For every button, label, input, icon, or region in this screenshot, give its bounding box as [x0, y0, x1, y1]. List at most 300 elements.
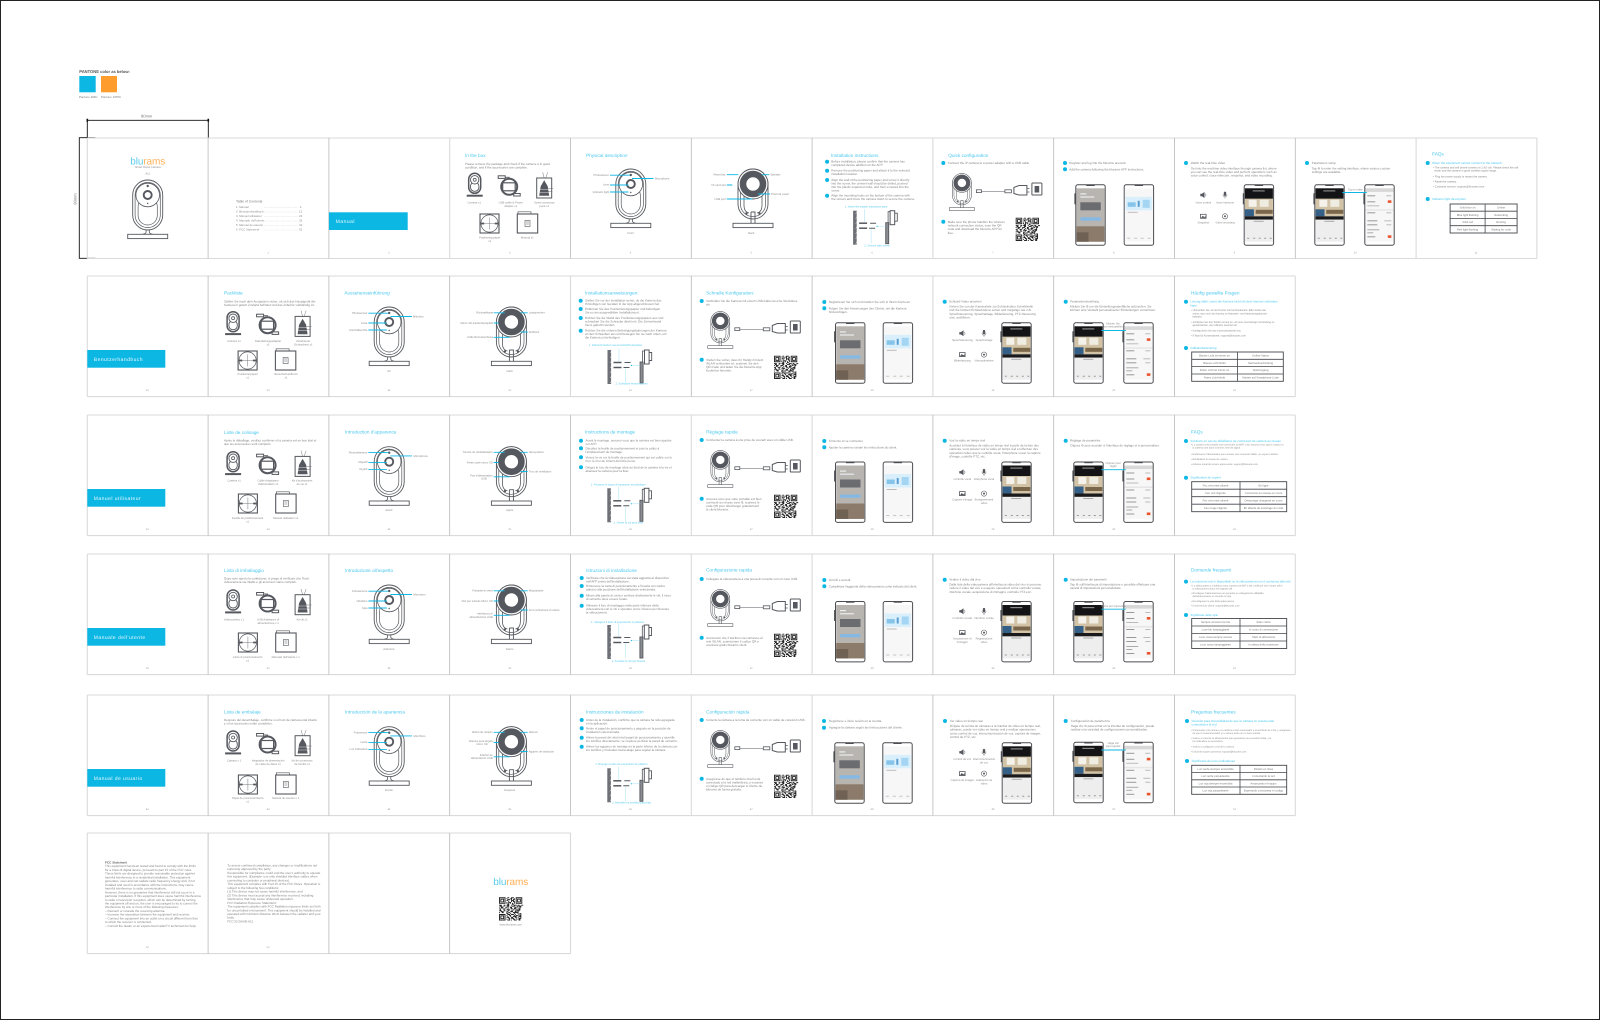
labels: alimentación USB: [471, 756, 493, 760]
connector label: para ajustar: [1106, 745, 1121, 748]
diagram captions: [591, 621, 646, 663]
page number: 46: [629, 808, 632, 811]
control icons: [959, 469, 987, 496]
statement body: body.: [227, 916, 235, 920]
labels: Spia: [362, 607, 368, 610]
accessory labels: Kit d'accessoires: [292, 480, 312, 482]
icon labels: Sprachanlage: [976, 339, 993, 342]
page: S'inscrire: [822, 439, 913, 531]
labels: [463, 450, 552, 512]
icon labels: [1195, 202, 1235, 224]
page: Réglage de paramètre: [1064, 439, 1160, 531]
phone: home: [1124, 185, 1154, 245]
intro text: y si los accesorios están completos.: [224, 722, 273, 726]
accessory labels: Manual x1: [521, 236, 534, 240]
steps text: Allineare il foro di montaggio nella parte inferiore della: [586, 604, 659, 608]
answers: la videocamera siano nel segnale wifi: [1192, 588, 1233, 590]
accessory labels: Adaptador de alimentación: [252, 760, 284, 762]
page number: 34: [387, 667, 391, 670]
step 1: Connectez la caméra à une prise de courant avec un câble USB.: [706, 438, 794, 442]
answers: • Plug the power supply to restart the camera.: [1433, 176, 1488, 178]
heading: Instructions de montage: [585, 430, 635, 435]
toc rows: 12: [299, 210, 303, 214]
page number: 8: [1113, 252, 1115, 254]
step 2: connecté au réseau sans fil, scannez le: [706, 500, 760, 504]
accessory labels: Videocamera x 1: [224, 618, 245, 622]
step: Accédez à l'interface de vidéo en temps réel à partir de la liste des: [949, 444, 1039, 448]
banner text: Manuel utilisateur: [94, 496, 141, 502]
heading: Instrucciones de instalación: [586, 710, 644, 715]
labels: USB: [481, 478, 487, 481]
connector label: régler: [1110, 464, 1117, 468]
phones with connector: [1072, 323, 1153, 383]
page: Introducción de la apariencia back: [469, 727, 554, 811]
banner: [87, 350, 165, 368]
indicator table: Luce blu lampeggiante: [1202, 629, 1230, 632]
labels: Foro ventazione di calore: [529, 609, 560, 612]
accessory labels: de cable de datos x1: [255, 763, 281, 766]
accessory labels: Datenleitungsadapter: [255, 340, 281, 343]
wall mount diagram: [853, 209, 897, 245]
indicator table: Sempre accesa luce blu: [1201, 621, 1231, 624]
toc rows: 3: [300, 205, 302, 209]
page: register: [1063, 161, 1154, 254]
step: Ver video en tiempo real: [950, 719, 983, 723]
pantone color header: Pantone 298C: [79, 95, 97, 99]
phone: home: [883, 323, 913, 383]
page number: 35: [508, 667, 512, 670]
steps text: die Kamera zu befestigen.: [585, 336, 621, 340]
indicator table: [1192, 482, 1287, 512]
page: FCC statement 1: [105, 860, 202, 949]
icon labels: Video recording: [1215, 222, 1235, 224]
labels: Vor: [387, 370, 391, 373]
phone: video: [1243, 185, 1274, 245]
indicator table: Blue light flashing: [1457, 214, 1479, 217]
page number: 1: [267, 252, 269, 254]
step 2: WLAN verbunden ist, scannen Sie den: [706, 361, 759, 365]
icon labels: video: [981, 782, 988, 785]
accessory labels: alimentazione x 1: [257, 622, 279, 625]
step: können eine Vielzahl personalisierter Einstellungen vornehmen.: [1070, 308, 1156, 312]
steps text: [586, 576, 671, 615]
step 2: kostenlos herunter.: [706, 369, 732, 373]
front camera: [369, 727, 409, 785]
question: Solutions en cas de défaillance de connexion de caméra au réseau: [1190, 439, 1281, 443]
indicator table: Networking: [1494, 214, 1508, 217]
labels: Photodétecteur: [349, 450, 367, 454]
diagram captions: 1. Spingere il tubo di espansione in plastica: [591, 621, 644, 624]
intro text: Dopo aver aperto la confezione, si prega di verificare che l'host: [224, 576, 309, 580]
labels: Microphone: [655, 177, 670, 180]
steps: S'inscrire et se connecter.: [829, 439, 864, 443]
statement body: to which the receiver is connected.: [105, 920, 152, 924]
labels: Kontrollleuchte: [349, 329, 368, 332]
page: Configuración de parámetros: [1064, 719, 1155, 811]
page number: 50: [1112, 808, 1116, 811]
statement body: FCC ID:2AIXB-A11: [227, 919, 253, 923]
heading: Schnelle Konfiguration:: [706, 291, 754, 296]
labels: Trou de ventilation: [529, 470, 552, 473]
indicator table: [1192, 352, 1283, 381]
accessory labels: x1: [267, 343, 270, 346]
heading: FAQs: [1191, 430, 1203, 434]
statement body: To assure continued compliance, any changes or modifications not: [227, 864, 317, 868]
page: FAQs French: [1184, 430, 1287, 531]
indicator table: Feu rouge clignote: [1204, 507, 1227, 510]
labels: Front: [627, 232, 634, 235]
icon labels: de voz: [980, 761, 989, 764]
wall mount diagram: [608, 348, 652, 384]
indicator table: Startvorgang: [1253, 369, 1269, 372]
heading: In the box: [465, 153, 486, 158]
banner: [329, 212, 408, 230]
steps: Folgen Sie den Anweisungen des Clients, um die Kamera: [829, 306, 907, 310]
page: Echtzeit-Video: [943, 300, 1036, 392]
labels: Lens: [603, 184, 610, 186]
question: La soluzione non è disponibile se la videocamera non è connessa alla rete: [1190, 580, 1291, 584]
leader lines: [494, 591, 528, 615]
connector label: um einzustellen: [1104, 326, 1123, 329]
statement body: – Increase the separation between the equipment and receiver.: [105, 913, 190, 917]
question: kann.: [1190, 303, 1198, 307]
labels: Voyant: [359, 468, 368, 471]
labels: Luz indicadora: [350, 748, 368, 751]
control icons: [1200, 192, 1228, 219]
indicator table: Arrancando el equipo: [1250, 782, 1277, 785]
steps text: Avant le montage, assurez-vous que la caméra est bien ajoutée: [586, 439, 672, 443]
heading: Réglage rapide: [706, 430, 738, 434]
step: Parametereinstellung: [1070, 300, 1099, 304]
steps text: en la aplicación.: [586, 722, 608, 726]
steps text: Verificare che la videocamera sia stata aggiunta al dispositivo: [586, 576, 669, 580]
page number: 11: [1475, 252, 1478, 254]
labels: [462, 590, 560, 651]
step bullets: [825, 160, 829, 198]
page number: 16: [629, 389, 632, 392]
icon labels: [952, 478, 995, 505]
step: Réglage de paramètre: [1070, 439, 1101, 443]
statement body: This equipment has been tested and found to comply with the limits: [105, 864, 196, 868]
page number: 40: [1112, 667, 1116, 670]
dimension brackets 80mm: [72, 114, 208, 258]
toc rows: 2. Benutzerhandbuch: [236, 210, 264, 214]
labels: Microfono: [413, 593, 426, 596]
page number: 19: [991, 389, 995, 392]
page number: 41: [1233, 667, 1236, 670]
labels: Indicator light: [593, 191, 609, 194]
accessories bottom row: [238, 631, 296, 652]
page number: 12: [146, 389, 149, 392]
labels: Back: [748, 232, 755, 235]
indicator table: Luce rossa sempre accesa: [1199, 636, 1232, 639]
page number: 47: [750, 808, 753, 811]
page: Manual de usuario banner: [87, 769, 165, 811]
labels: Interfaccia di: [477, 613, 493, 616]
statement body: (2) This device must accept any interference received, including: [227, 893, 314, 897]
camera and adapter diagram: [708, 590, 800, 626]
accessory labels: [227, 758, 313, 803]
page number: 49: [991, 808, 995, 811]
leader lines: [368, 313, 412, 330]
steps: [1063, 161, 1144, 171]
page number: 15: [508, 389, 512, 392]
indicator table: Stato di attivazione: [1252, 636, 1276, 639]
page: Installationsanweisungen: [579, 291, 667, 392]
accessory labels: Screw accessory: [534, 202, 555, 204]
page number: 9: [1234, 252, 1236, 254]
page: Introducción de la apariencia front: [345, 710, 426, 811]
accessory labels: de vis x1: [297, 483, 308, 486]
labels: [350, 731, 426, 792]
indicator table: Warten auf Smartphone-Code: [1242, 377, 1279, 380]
heading: Introduzione all'aspetto: [345, 568, 393, 573]
step: como control de voz, intercomunicación de voz, captura de imagen,: [950, 731, 1041, 735]
labels: Nach: [506, 370, 513, 373]
steps text: mur, le mur de ciment doit être percé.: [586, 459, 636, 463]
labels: Port d'alimentation: [470, 474, 493, 478]
camera and adapter diagram: [949, 174, 1042, 210]
heading: Configuración rápida: [706, 710, 750, 714]
toc rows: 3. Manuel utilisateur: [236, 214, 262, 218]
steps text: into the screw, the cement wall should be drilled, pushed: [831, 182, 908, 186]
heading: Preguntas frecuentes: [1191, 710, 1236, 714]
steps: [822, 719, 903, 730]
labels: Speaker: [770, 174, 781, 177]
page: parameter setup: [1305, 161, 1394, 254]
page: Introduction d'apparence back: [463, 447, 552, 531]
step: usw. ausführen.: [949, 316, 971, 320]
diagram captions: [845, 205, 890, 247]
labels: Objectif: [358, 461, 368, 464]
intro text: Please remove the package and check if the camera is in good: [465, 162, 550, 166]
accessory labels: Manual de usuario x 1: [272, 797, 300, 800]
intro text: Stellen Sie nach dem Auspacken sicher, ob sich das Hauptgerät der: [224, 300, 316, 304]
page number: 52: [146, 946, 149, 949]
indicator table: In corso di connessione: [1249, 629, 1278, 632]
phone: login: [834, 323, 865, 383]
accessory labels: Kit de accesorios: [292, 760, 313, 762]
step bullets: [580, 718, 584, 749]
steps text: Align the wall of the positioning paper and screw it directly: [831, 178, 910, 182]
page number: 29: [991, 528, 995, 531]
step 1: [700, 299, 798, 307]
step 2: [700, 636, 763, 647]
page: Manual banner: [329, 212, 408, 254]
labels: Fotosensore: [352, 590, 368, 593]
intro text: condition, and if the accessories are complete.: [465, 166, 528, 170]
page: real-time video: [1184, 161, 1277, 254]
step: caméras, vous pouvez voir la vidéo en temps réel et effectuer des: [949, 447, 1038, 451]
icon labels: Enregistrement: [975, 498, 993, 502]
diagram captions: 1. Dehnschrauben aus Kunststoff einsetzen: [589, 344, 643, 347]
answers: de que el router/enrutador y la cámara estén en un buen estado.: [1192, 732, 1261, 735]
heading: Installation instructions: [831, 153, 879, 158]
heading: FAQs: [1432, 152, 1444, 156]
labels: Kühlloch: [529, 331, 540, 334]
labels: [352, 590, 426, 651]
step 1: Connect the IP camera to a power adapter with a USB cable.: [948, 161, 1030, 165]
answers: router and the camera in good wireless signal range.: [1434, 170, 1497, 173]
phones with connector: [1072, 601, 1153, 662]
statement body: particular installation. If this equipment does cause harmful interference: [105, 894, 202, 898]
answers: • La caméra et le portable sont connectés au WiFi 2.4G. Assurez-vous que le routeur et: [1191, 444, 1283, 447]
page: Introduzione all'aspetto front: [345, 568, 426, 670]
icon labels: Contrôle vocal: [954, 478, 971, 481]
accessory labels: Kamera x1: [227, 340, 241, 343]
steps text: Richten Sie die unteren Befestigungsbohrungen der Kamera: [585, 329, 667, 333]
steps text: [586, 718, 678, 752]
step: vedere il video dal vivo e eseguire operazioni come controllo vocale,: [949, 586, 1041, 590]
step: Gehen Sie von der Kameraliste zur Echtzeitvideo-Schnittstelle: [949, 304, 1033, 308]
page number: 28: [871, 528, 874, 531]
logo: blurams: [130, 156, 165, 168]
page number: 51: [1233, 808, 1236, 811]
icon labels: immagini: [957, 641, 968, 644]
step 2: conectado a la red inalámbrica, y escanee: [706, 780, 763, 784]
intro text: que les accessoires sont complets.: [224, 442, 271, 446]
icon labels: [952, 617, 994, 644]
answers: gewährleisten, der Indikator leuchtet auf.: [1192, 324, 1238, 327]
step: settings are available.: [1312, 170, 1341, 174]
step: Get into the real-time video interface through camera list, where: [1191, 166, 1277, 170]
phone: home: [883, 743, 912, 803]
camera illustration: [128, 180, 168, 239]
leader lines: [727, 175, 770, 199]
labels: USB port: [715, 198, 726, 201]
step: Klicken Sie ⚙ um die Einstellungsoberfläche aufzurufen. Sie: [1070, 304, 1152, 308]
step: Dalla lista della videocamera all'interfaccia video dal vivo si possono: [949, 582, 1041, 586]
accessory labels: Manuale dell'utente x 1: [272, 656, 300, 659]
labels: Interfaz de: [480, 754, 493, 757]
diagram captions: 2. Schraube einschrauben: [615, 382, 648, 386]
statement body: Responsible for compliance could void the user's authority to operate: [227, 871, 321, 875]
step 2: QR-Code und laden Sie die blurams-App: [706, 365, 762, 369]
answers: • Customer service: support@blurams.com: [1433, 186, 1485, 188]
heading: Liste de colisage: [224, 430, 259, 435]
page number: 25: [508, 528, 512, 531]
toc rows: 1. Manual: [236, 205, 249, 209]
page number: 42: [146, 808, 149, 811]
answers: sicher, dass sich die Kamera im Netzwerk- und Abdeckungsbereich: [1192, 312, 1268, 315]
step 2: el código QR para descargar el cliente de: [706, 784, 762, 788]
steps text: Décollez la feuille de positionnement et puis la collez à: [586, 446, 659, 450]
accessory labels: de tornillo x1: [294, 763, 310, 766]
page number: 32: [146, 667, 149, 670]
labels: Rückstelltaste: [476, 312, 494, 315]
statement body: generates, uses and can radiate radio frequency energy and, if not: [105, 879, 195, 883]
step 2: [941, 220, 1005, 235]
page number: 24: [387, 528, 391, 531]
accessory labels: [227, 340, 313, 379]
page number: 6: [871, 252, 873, 254]
page number: 38: [871, 667, 874, 670]
accessory labels: [468, 202, 555, 243]
step: [1064, 578, 1156, 590]
intro text: videocamera sia intatto e gli accessori siano completi.: [224, 580, 297, 584]
phone: login: [834, 601, 865, 662]
step: Echtzeit-Video ansehen: [949, 300, 982, 304]
accessory labels: Papel de posicionamiento: [232, 797, 263, 800]
labels: Linse: [361, 322, 368, 325]
steps text: Hinzufügen von Geräten in der App abgeschlossen hat.: [585, 302, 660, 306]
indicator table: Red light flashing: [1457, 228, 1479, 231]
qr code: [774, 634, 798, 656]
diagram captions: 2. Secure with screw: [864, 244, 890, 247]
labels: Altoparlante: [529, 590, 544, 593]
page: Vedere il video: [943, 578, 1041, 670]
accessories top row: [225, 311, 312, 336]
accessory labels: x1: [285, 376, 288, 379]
diagram captions: 2. Visser la vis pour fixer: [614, 522, 644, 525]
steps: Ajouter la caméra suivant les instructions du client.: [829, 445, 897, 449]
page number: 4: [630, 252, 632, 254]
step: und Sie können Echtzeitvideos sehen und Vorgänge wie z.B.: [949, 308, 1032, 312]
step: Configuración de parámetros: [1071, 719, 1110, 723]
page number: 43: [267, 808, 270, 811]
step: Tap ⚙ sull'interfaccia di impostazione e possibile effettuare una: [1070, 582, 1156, 586]
leader lines: [494, 313, 528, 337]
step 2: [700, 777, 763, 792]
steps: Registrieren Sie sich und melden Sie sich in Ihrem Konto an.: [829, 300, 911, 304]
steps text: an den Schrauben aus und bewegen Sie sie nach unten, um: [585, 332, 667, 336]
question: [1185, 719, 1274, 726]
heading: Istruzioni di installazione: [586, 568, 637, 573]
indicator table: Conectando la red: [1252, 775, 1275, 778]
front camera: [369, 447, 409, 505]
steps text: di cemento deve essere forato.: [586, 597, 628, 601]
step: Watch the real-time video: [1191, 161, 1225, 165]
accessory labels: x1: [488, 240, 492, 243]
indicator table: Estado en línea: [1254, 767, 1274, 771]
answers: [1191, 729, 1291, 754]
steps text: l'emplacement de montage.: [586, 450, 623, 454]
page: Schnelle Konfiguration: [700, 291, 800, 392]
step 2: le client blurams.: [706, 508, 729, 512]
toc title: Table of Contents: [236, 200, 263, 204]
answers: • Vuelva a configurar la red de la cámara.: [1191, 746, 1235, 748]
answers: • La videocamera e il telefono sono connessi al WiFi 2.4G, verificare che il router wifi e: [1191, 584, 1282, 588]
page: Häufig gestellte Fragen: [1184, 290, 1283, 392]
accessory labels: adapter x1: [504, 205, 518, 208]
page: Voir la vidéo: [943, 439, 1041, 531]
indicator table: Luce rossa lampeggiante: [1200, 644, 1231, 647]
banner: [87, 628, 165, 646]
indicator heading: Significato delle spie: [1190, 613, 1218, 617]
page: cover: [128, 156, 168, 239]
indicator table: Luz roja siempre encendida: [1199, 782, 1233, 785]
labels: Microphone: [413, 455, 428, 458]
phone: video: [1000, 601, 1031, 662]
indicator table: Luz roja parpadeante: [1202, 790, 1229, 793]
back camera: [491, 447, 531, 505]
steps text: muss gebohrt werden.: [585, 323, 615, 327]
front camera: [369, 307, 409, 366]
statement body: harmful interference to radio communications.: [105, 887, 167, 891]
heading: Packliste: [224, 291, 243, 296]
steps text: instalación seleccionada.: [586, 730, 620, 734]
indicator table: Esperando a escanear el código: [1244, 789, 1284, 793]
page: Liste de colisage: [224, 430, 316, 531]
indicator table: Solid blue on: [1460, 207, 1476, 210]
indicator table: In attesa della scansione: [1248, 644, 1279, 647]
intro text: Kamera in gutem Zustand befindet und das Zubehör vollständig ist.: [224, 303, 315, 307]
statement body: interference that may cause undesired operation.: [227, 897, 294, 901]
page number: 22: [146, 528, 149, 531]
page number: 18: [871, 389, 874, 392]
steps text: abaissez la caméra pour la fixer.: [586, 469, 629, 473]
answers: dell'alimentazione si accende la spia: [1192, 595, 1232, 598]
